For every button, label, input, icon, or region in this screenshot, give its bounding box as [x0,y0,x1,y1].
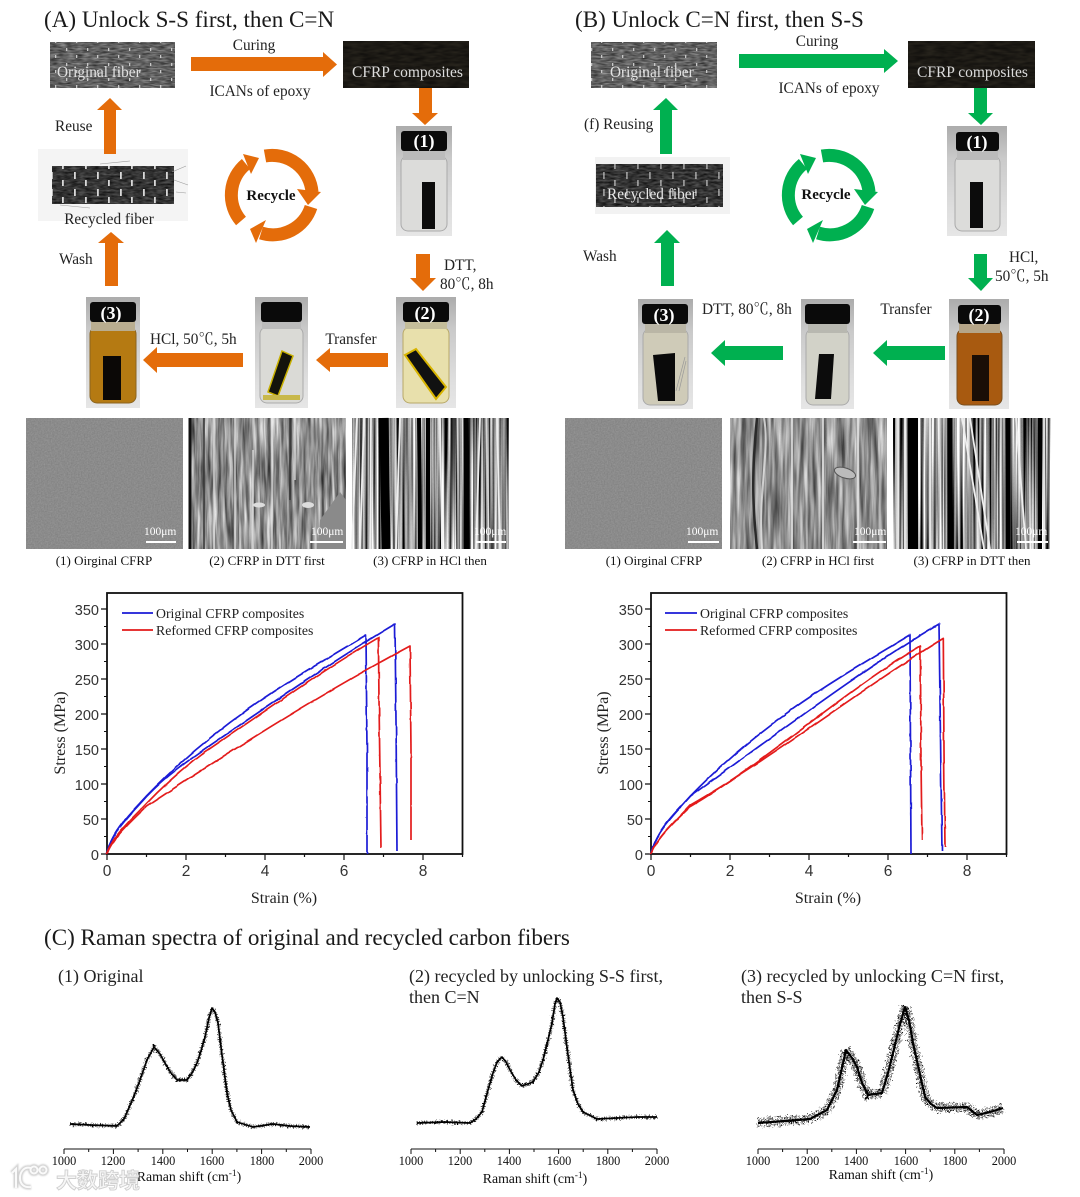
vial transfer stage [255,297,308,408]
line chart: stress-strain A: 300 [75,638,99,654]
line chart: stress-strain A: 0 [91,848,99,864]
spectrum 1: 1800 [250,1154,274,1168]
photo: CFRP composites: CFRP composites [352,64,463,81]
vial 2 [949,299,1009,409]
subheading 3: (3) recycled by unlocking C=N first, [741,966,1004,987]
arrow: to vial 1 [412,88,438,125]
vial 3: (3) [654,305,674,326]
spectrum 2 [399,966,669,1187]
line chart: stress-strain B: 300 [619,638,643,654]
photo: recycled fiber [595,157,730,214]
icon: recycle ring [231,154,321,243]
SEM image A1: 100μm [144,526,176,538]
spectrum 2: 1000 [399,1154,423,1168]
spectrum 2: 1200 [448,1154,472,1168]
spectrum 1: 1600 [200,1154,224,1168]
line chart: stress-strain A: 8 [419,863,427,880]
SEM image B2: 100μm [854,526,886,538]
photo: recycled fiber [38,149,188,228]
vial 1 [396,126,452,236]
arrow: wash [654,230,680,286]
arrow: reusing [653,98,678,154]
line chart: stress-strain A: 100 [75,778,99,794]
line chart: stress-strain B: 100 [619,778,643,794]
caption B1: (1) Oirginal CFRP [606,553,702,568]
line chart: stress-strain B: 50 [627,813,643,829]
blue curves [651,624,942,854]
vial 3 [86,297,140,408]
vial 2: (2) [968,305,990,326]
label: curing: Curing [796,33,839,50]
label: DTT conditions: DTT, 80℃, 8h [702,301,792,318]
label: HCl conditions [995,249,1049,285]
label: reuse: Reuse [55,118,93,135]
vial 2: (2) [414,303,436,324]
line chart: stress-strain B: 0 [635,848,643,864]
label: transfer: Transfer [325,331,377,348]
line chart: stress-strain A: Strain (%) [251,890,317,907]
spectrum 2: -1 [575,1171,583,1181]
arrow: curing [191,52,337,77]
legend: Original CFRP composites [156,606,304,621]
label: DTT conditions: DTT, [444,257,476,274]
SEM image A3 [352,418,509,549]
spectrum 3: 1600 [894,1154,918,1168]
label: DTT conditions: 80℃, 8h [440,276,494,293]
spectrum 3: 1000 [746,1154,770,1168]
subheading 3 [741,966,1004,1007]
legend [122,606,313,638]
vial 1 [947,126,1007,236]
caption B2: (2) CFRP in HCl first [762,553,874,568]
line chart: stress-strain A: 200 [75,708,99,724]
caption A2: (2) CFRP in DTT first [209,553,325,568]
vial 3: (3) [100,303,122,324]
vial 2 [396,297,456,408]
caption A3: (3) CFRP in HCl then [373,553,487,568]
caption B3: (3) CFRP in DTT then [913,553,1031,568]
line chart: stress-strain A: 0 [103,863,112,880]
arrow: reuse [97,98,122,154]
legend: Reformed CFRP composites [156,623,313,638]
SEM image B1 [565,418,722,549]
subheading 1: (1) Original [58,966,143,987]
subheading 2 [409,966,663,1007]
line chart: stress-strain B: Strain (%) [795,890,861,907]
subheading 3: then S-S [741,987,803,1007]
arrow: DTT step [410,254,436,291]
spectrum 2: ) [583,1171,587,1187]
label: transfer: Transfer [880,301,932,318]
photo: recycled fiber: Recycled fiber [64,211,154,228]
line chart: stress-strain B: 4 [805,863,814,880]
spectrum 3: -1 [921,1167,929,1177]
line chart: stress-strain B: 150 [619,743,643,759]
heading A: (A) Unlock S-S first, then C=N [44,6,334,32]
arrow: DTT step [711,340,783,366]
line chart: stress-strain B: 350 [619,603,643,619]
line chart: stress-strain A: 150 [75,743,99,759]
line chart: stress-strain B: 8 [963,863,971,880]
spectrum 3 [741,966,1016,1183]
spectrum 2: 2000 [645,1154,669,1168]
panel A: unlock S-S first cycle [26,6,509,568]
spectrum 3: Raman shift (cm [829,1167,921,1182]
photo: original fiber: Original fiber [57,64,141,81]
photo: CFRP composites: CFRP composites [917,64,1028,81]
line chart: stress-strain B: 0 [647,863,656,880]
line chart: stress-strain A: Stress (MPa) [52,691,69,775]
vial 1: (1) [414,131,434,152]
line chart: stress-strain B: Stress (MPa) [595,691,612,775]
spectrum 1: ) [237,1169,241,1185]
SEM image A2 [189,418,346,549]
red curves [107,638,411,854]
spectrum 1: Raman shift (cm [137,1169,229,1184]
spectrum 2: 1400 [497,1154,521,1168]
line chart: stress-strain A: 250 [75,673,99,689]
icon: recycle ring [788,154,878,243]
line chart: stress-strain B: 2 [726,863,734,880]
panel C: Raman spectra [44,924,1016,1187]
vial 3 [638,299,693,409]
line chart: stress-strain A: 50 [83,813,99,829]
watermark: 大数跨境 [56,1165,140,1195]
SEM image B2 [730,418,887,549]
photo: original fiber [50,42,175,88]
spectrum 3: 1800 [943,1154,967,1168]
line chart: stress-strain A: 2 [182,863,190,880]
label: HCl conditions: HCl, 50℃, 5h [150,331,237,348]
line chart: stress-strain B: 250 [619,673,643,689]
spectrum 1: -1 [229,1169,237,1179]
label: ICANs of epoxy: ICANs of epoxy [209,83,311,100]
spectrum 1: 2000 [299,1154,323,1168]
label: wash: Wash [583,248,617,265]
arrow: curing [739,49,898,73]
watermark [12,1165,140,1195]
photo: CFRP composites [908,41,1035,88]
vial transfer stage [801,299,854,409]
legend: Reformed CFRP composites [700,623,857,638]
label: wash: Wash [59,251,93,268]
line chart: stress-strain B [595,593,1006,907]
spectrum 3: ) [929,1167,933,1183]
photo: CFRP composites [343,41,469,88]
label: HCl conditions: HCl, [1009,249,1038,266]
spectrum 3: 1400 [844,1154,868,1168]
spectrum 3: 2000 [992,1154,1016,1168]
photo: recycled fiber: Recycled fiber [607,186,697,203]
spectrum 3: 1200 [795,1154,819,1168]
caption A1: (1) Oirginal CFRP [56,553,152,568]
spectrum 1 [52,966,323,1185]
subheading 2: (2) recycled by unlocking S-S first, [409,966,663,987]
SEM image B3 [893,418,1051,549]
vial 1: (1) [966,132,988,153]
arrow: wash [98,232,124,286]
SEM image B3: 100μm [1015,526,1047,538]
SEM image B1: 100μm [686,526,718,538]
heading C: (C) Raman spectra of original and recycled carbon fibers [44,924,570,950]
subheading 2: then C=N [409,987,480,1007]
arrow: HCl step [968,254,993,291]
spectrum 2: 1600 [547,1154,571,1168]
arrow: HCl step [143,347,243,373]
icon: recycle ring: Recycle [801,187,851,203]
SEM image A1 [26,418,183,549]
photo: original fiber [591,42,717,88]
line chart: stress-strain A: 4 [261,863,270,880]
line chart: stress-strain A [52,593,462,907]
line chart: stress-strain A: 6 [340,863,348,880]
SEM image A3: 100μm [474,526,506,538]
spectrum 1: 1200 [101,1154,125,1168]
spectrum 1: 1400 [151,1154,175,1168]
label: HCl conditions: 50℃, 5h [995,268,1049,285]
line chart: stress-strain A: 350 [75,603,99,619]
legend: Original CFRP composites [700,606,848,621]
icon: recycle ring: Recycle [246,188,296,204]
SEM image A2: 100μm [311,526,343,538]
label: DTT conditions [440,257,494,293]
photo: original fiber: Original fiber [610,64,694,81]
arrow: transfer [873,340,945,366]
heading B: (B) Unlock C=N first, then S-S [575,6,864,32]
label: curing: Curing [233,37,276,54]
spectrum 2: 1800 [596,1154,620,1168]
spectrum 1: 1000 [52,1154,76,1168]
panel B: unlock C=N first cycle [565,6,1051,568]
arrow: to vial 1 [968,88,993,125]
label: reusing: (f) Reusing [584,116,654,133]
arrow: transfer [316,348,388,372]
label: ICANs of epoxy: ICANs of epoxy [778,80,880,97]
line chart: stress-strain B: 200 [619,708,643,724]
line chart: stress-strain B: 6 [884,863,892,880]
red curves [651,638,945,854]
blue curves [107,624,397,854]
legend [665,606,857,638]
spectrum 2: Raman shift (cm [483,1171,575,1186]
